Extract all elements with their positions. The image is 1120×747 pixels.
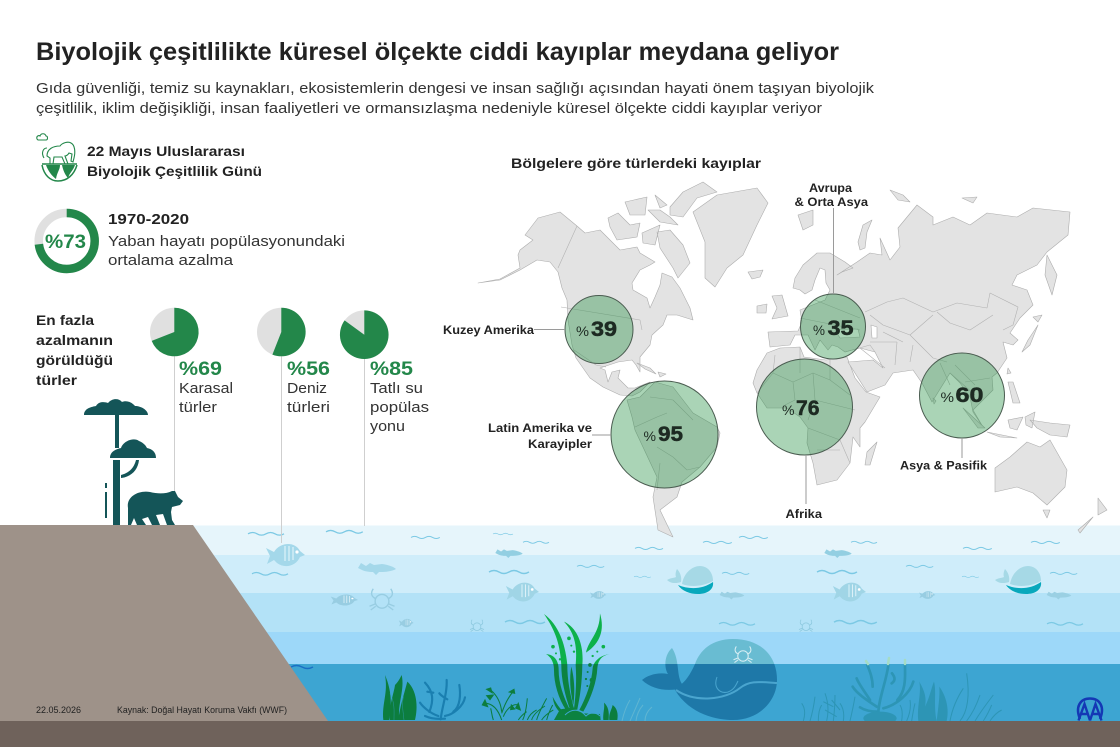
world map (478, 182, 1107, 537)
stat: marine species: Deniz (287, 380, 327, 397)
south america (627, 382, 720, 537)
circle: Asia and Pacific: % (940, 389, 954, 405)
north america (478, 212, 693, 396)
seabed (0, 721, 1120, 747)
arctic islands (608, 182, 717, 377)
icon: AA logo (1078, 698, 1102, 720)
pie chart: freshwater (340, 310, 389, 359)
circle: Europe and Central Asia: 35 (828, 317, 854, 340)
australia (995, 440, 1067, 505)
ocean layers (0, 526, 1120, 721)
fish school (266, 544, 1071, 632)
date: 22.05.2026 (36, 705, 81, 715)
small whales (667, 566, 1041, 594)
label: Asia Pacific: Asya & Pasifik (900, 458, 987, 472)
icon: trees (84, 399, 156, 525)
subtitle: çeşitlilik, iklim değişikliği, insan faaliyetleri ve ormansızlaşma nedeniyle küresel ölçekte ciddi kayıplar veriyor (36, 100, 822, 117)
title: Biyolojik çeşitlilikte küresel ölçekte ciddi kayıplar meydana geliyor (36, 38, 839, 66)
circle: Africa: % (782, 402, 794, 418)
inland seas (835, 325, 877, 338)
stat: freshwater populations: %85 (370, 359, 413, 380)
text: wildlife decline: Yaban hayatı popülasyonundaki (108, 233, 345, 250)
label: Latin America: Karayipler (528, 437, 592, 451)
circle: Latin America and Caribbean: 95 (658, 423, 683, 446)
label: Latin America (488, 421, 592, 451)
circle: Latin America and Caribbean (611, 381, 718, 488)
pie chart: marine (257, 308, 306, 356)
pale coral tips (866, 658, 905, 664)
dark kelp (383, 675, 618, 720)
heading: biodiversity day: Biyolojik Çeşitlilik Günü (87, 163, 262, 179)
ocean waves (248, 530, 1083, 668)
pie chart: terrestrial (150, 308, 199, 356)
circle: Europe and Central Asia (800, 294, 866, 359)
stat: terrestrial species: türler (179, 399, 217, 416)
circle: Asia and Pacific (920, 353, 1004, 438)
circle: Africa (756, 359, 852, 455)
tasmania and new zealand (1043, 498, 1107, 533)
map leader lines (534, 208, 962, 504)
southeast asia islands (933, 368, 1070, 438)
label: Europe: & Orta Asya (794, 195, 868, 209)
circle: North America (565, 296, 633, 364)
label: North America: Kuzey Amerika (443, 323, 534, 337)
heading: species with most decline: görüldüğü (36, 352, 113, 368)
heading: species with most decline: türler (36, 372, 78, 388)
stat: marine species: türleri (287, 399, 330, 416)
arctic russia (798, 190, 977, 250)
label: Europe (794, 181, 868, 209)
stat: terrestrial species: Karasal (179, 380, 233, 397)
leader lines (174, 356, 364, 543)
circle: North America: 39 (591, 318, 617, 341)
iceland (748, 270, 763, 279)
subtitle (36, 80, 875, 117)
land slope (0, 525, 328, 721)
source: Kaynak: Doğal Hayatı Koruma Vakfı (WWF) (117, 705, 287, 715)
label: Europe: Avrupa (809, 181, 852, 195)
big whale (642, 639, 777, 720)
japan and kamchatka (1022, 255, 1057, 352)
british isles (757, 295, 788, 319)
circle: Africa: 76 (796, 397, 820, 420)
circle: Europe and Central Asia: % (813, 322, 825, 338)
heading: species with most decline: azalmanın (36, 332, 113, 348)
circle: Asia and Pacific: 60 (956, 384, 984, 407)
subtitle: Gıda güvenliği, temiz su kaynakları, ekosistemlerin dengesi ve insan sağlığı açısından hayati önem taşıyan biyolojik (36, 80, 875, 97)
circle: Latin America and Caribbean: % (644, 428, 656, 444)
blue coral (420, 680, 465, 719)
stat: freshwater populations: yonu (370, 418, 405, 435)
madagascar (865, 442, 877, 465)
heading: species with most decline (36, 312, 113, 388)
pale blue grass (622, 698, 652, 721)
eurasia (768, 205, 1070, 427)
donut chart: 73 percent (39, 213, 95, 269)
text: wildlife decline: 1970-2020 (108, 211, 189, 228)
stat: freshwater populations: popülas (370, 399, 429, 416)
donut chart: 73 percent: %73 (45, 232, 86, 253)
africa (753, 347, 880, 485)
label: Africa: Afrika (786, 507, 822, 521)
heading: map: Bölgelere göre türlerdeki kayıplar (511, 155, 762, 171)
heading: species with most decline: En fazla (36, 312, 94, 328)
circle: North America: % (576, 323, 589, 339)
text: wildlife decline: ortalama azalma (108, 252, 234, 269)
heading: biodiversity day (87, 143, 262, 179)
text: wildlife decline (108, 211, 345, 269)
icon: elephant on globe (37, 134, 77, 181)
stat: freshwater populations: Tatlı su (370, 380, 423, 397)
stat: terrestrial species: %69 (179, 359, 222, 380)
teal coral and grass (802, 665, 1002, 725)
underwater grass (518, 698, 553, 720)
stat: marine species: %56 (287, 359, 330, 380)
small green plant (482, 688, 520, 720)
label: Latin America: Latin Amerika ve (488, 421, 592, 435)
big green seaweed (544, 613, 610, 720)
borders (558, 226, 1018, 490)
greenland (693, 188, 768, 287)
stat: terrestrial species (179, 359, 233, 416)
icon: bear (128, 491, 183, 525)
stat: freshwater populations (370, 359, 429, 435)
stat: marine species (287, 359, 330, 416)
heading: biodiversity day: 22 Mayıs Uluslararası (87, 143, 245, 159)
